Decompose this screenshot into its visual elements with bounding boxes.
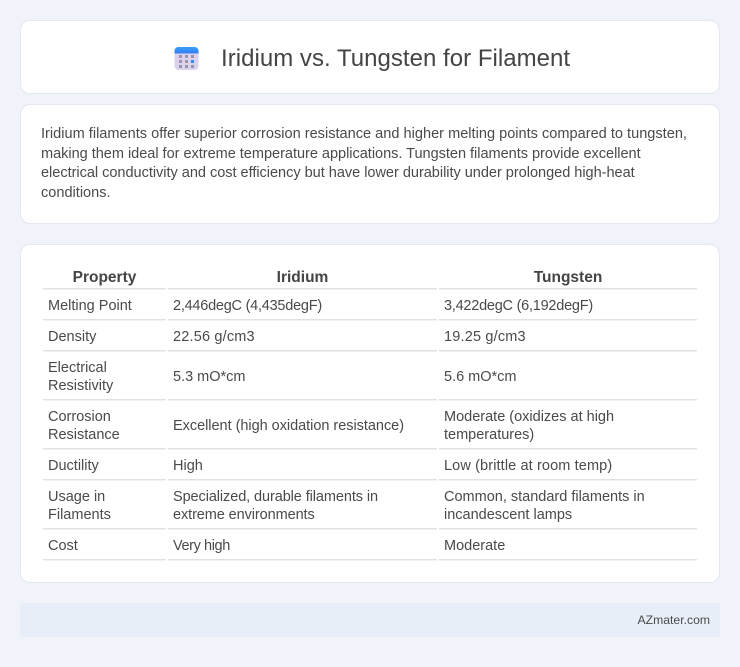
summary text: making them ideal for extreme temperature applications. Tungsten filaments provide excellent bbox=[41, 146, 641, 162]
summary panel bbox=[20, 104, 720, 224]
row: cost bbox=[48, 538, 505, 554]
footer credit: AZmater.com bbox=[638, 613, 710, 627]
row: density: 22.56 g/cm3 bbox=[173, 329, 255, 345]
row: electrical resistivity: 5.6 mO*cm bbox=[444, 369, 517, 385]
row: corrosion resistance: Excellent (high oxidation resistance) bbox=[173, 418, 404, 434]
table header: Tungsten bbox=[534, 269, 602, 286]
row: ductility bbox=[48, 458, 612, 474]
footer bar bbox=[20, 603, 720, 637]
row: corrosion resistance: temperatures) bbox=[444, 427, 534, 443]
row: cost: Very high bbox=[173, 538, 230, 554]
row: electrical resistivity bbox=[48, 360, 517, 394]
summary text: Iridium filaments offer superior corrosion resistance and higher melting points compared to tungsten, bbox=[41, 126, 687, 142]
summary text: electrical conductivity and cost efficiency but have lower durability under prolonged high-heat bbox=[41, 165, 635, 181]
header panel bbox=[20, 20, 720, 94]
row: electrical resistivity: Resistivity bbox=[48, 378, 113, 394]
row: melting point bbox=[48, 298, 593, 314]
row: usage in filaments: Usage in bbox=[48, 489, 105, 505]
row: usage in filaments: Common, standard filaments in bbox=[444, 489, 645, 505]
row: melting point: Melting Point bbox=[48, 298, 132, 314]
row: electrical resistivity: Electrical bbox=[48, 360, 107, 376]
row: ductility: Ductility bbox=[48, 458, 99, 474]
icon: calendar bbox=[174, 47, 198, 70]
summary text bbox=[41, 126, 687, 201]
row: corrosion resistance bbox=[48, 409, 614, 443]
table header bbox=[73, 269, 602, 286]
row: corrosion resistance: Corrosion bbox=[48, 409, 111, 425]
row: density: Density bbox=[48, 329, 96, 345]
row: usage in filaments: Filaments bbox=[48, 507, 111, 523]
row: usage in filaments: extreme environments bbox=[173, 507, 315, 523]
row: corrosion resistance: Resistance bbox=[48, 427, 120, 443]
comparison table panel bbox=[20, 244, 720, 583]
row: melting point: 2,446degC (4,435degF) bbox=[173, 298, 322, 314]
row: ductility: High bbox=[173, 458, 203, 474]
summary text: conditions. bbox=[41, 185, 111, 201]
row: usage in filaments: incandescent lamps bbox=[444, 507, 572, 523]
row: cost: Moderate bbox=[444, 538, 505, 554]
row: corrosion resistance: Moderate (oxidizes at high bbox=[444, 409, 614, 425]
row: density: 19.25 g/cm3 bbox=[444, 329, 526, 345]
row: usage in filaments bbox=[48, 489, 645, 523]
title: Iridium vs. Tungsten for Filament bbox=[221, 45, 570, 72]
table header: Property bbox=[73, 269, 136, 286]
table header: Iridium bbox=[277, 269, 328, 286]
row: cost: Cost bbox=[48, 538, 78, 554]
row: ductility: Low (brittle at room temp) bbox=[444, 458, 612, 474]
row: melting point: 3,422degC (6,192degF) bbox=[444, 298, 593, 314]
row: density bbox=[48, 329, 526, 345]
row: electrical resistivity: 5.3 mO*cm bbox=[173, 369, 246, 385]
row: usage in filaments: Specialized, durable filaments in bbox=[173, 489, 378, 505]
